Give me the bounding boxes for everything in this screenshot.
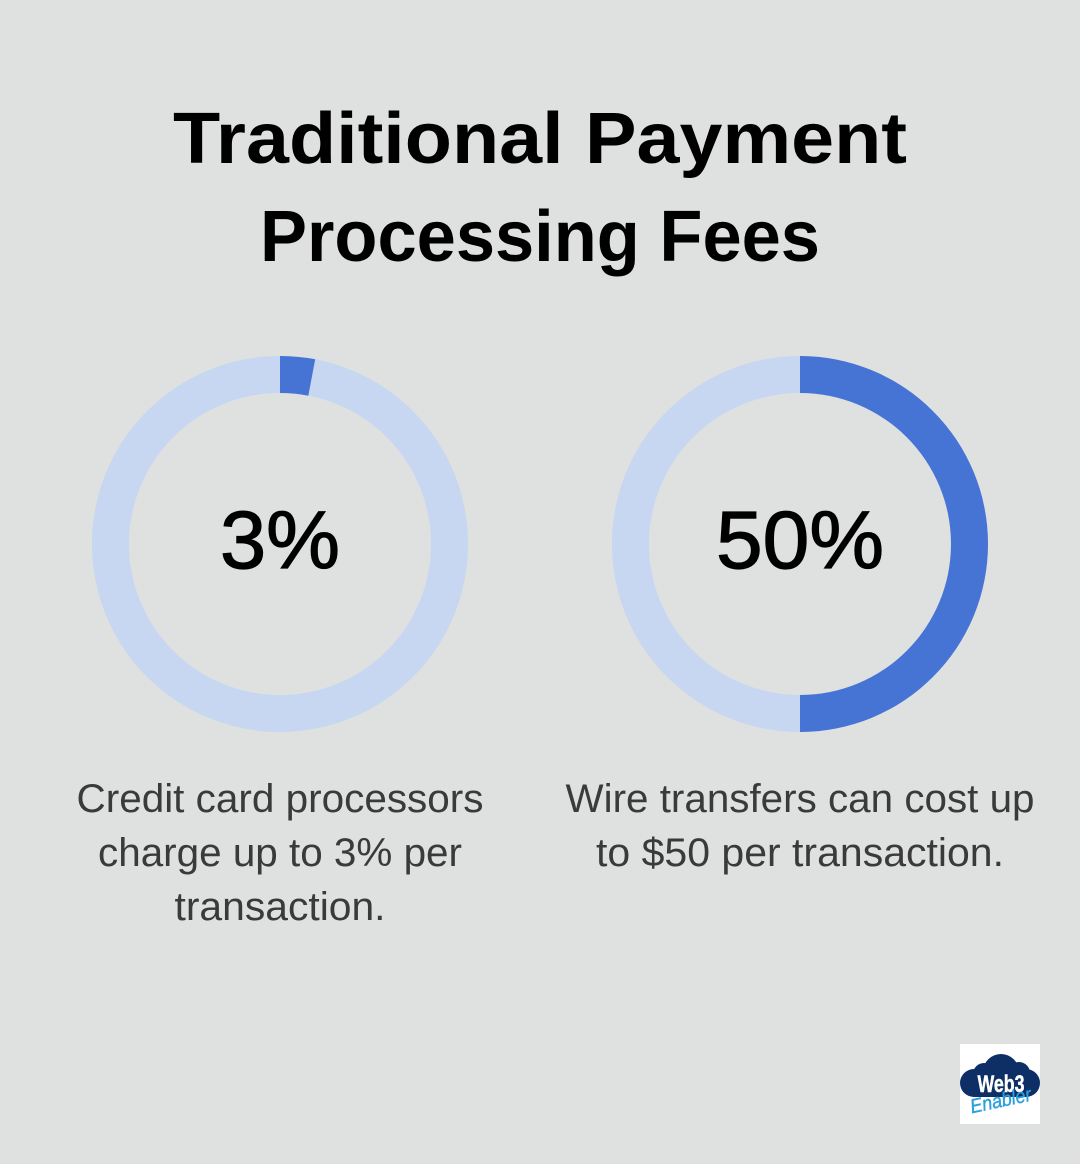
value: 3%: 3% <box>220 495 340 586</box>
description: wire transfers: Wire transfers can cost up <box>566 777 1034 821</box>
title <box>173 99 907 277</box>
description: wire transfers: to $50 per transaction. <box>596 831 1004 875</box>
description: credit card processors: charge up to 3% per <box>98 831 462 875</box>
logo: Web3 Enabler: Web3 <box>978 1071 1024 1098</box>
logo: Web3 Enabler: Enabler <box>968 1084 1035 1118</box>
title: Processing Fees <box>260 197 820 277</box>
logo: Web3 Enabler <box>960 1044 1040 1124</box>
description: credit card processors <box>76 777 484 929</box>
donut chart: 3% <box>110 356 450 714</box>
title: Traditional Payment <box>173 99 907 179</box>
panel: wire transfer fee <box>566 356 1034 875</box>
panel: credit card fee <box>76 356 484 929</box>
description: credit card processors: transaction. <box>174 885 386 929</box>
description: wire transfers <box>566 777 1034 875</box>
icon: cloud <box>960 1054 1040 1097</box>
donut chart: 50% <box>630 356 988 732</box>
value: 50%: 50% <box>716 495 884 586</box>
description: credit card processors: Credit card processors <box>76 777 484 821</box>
